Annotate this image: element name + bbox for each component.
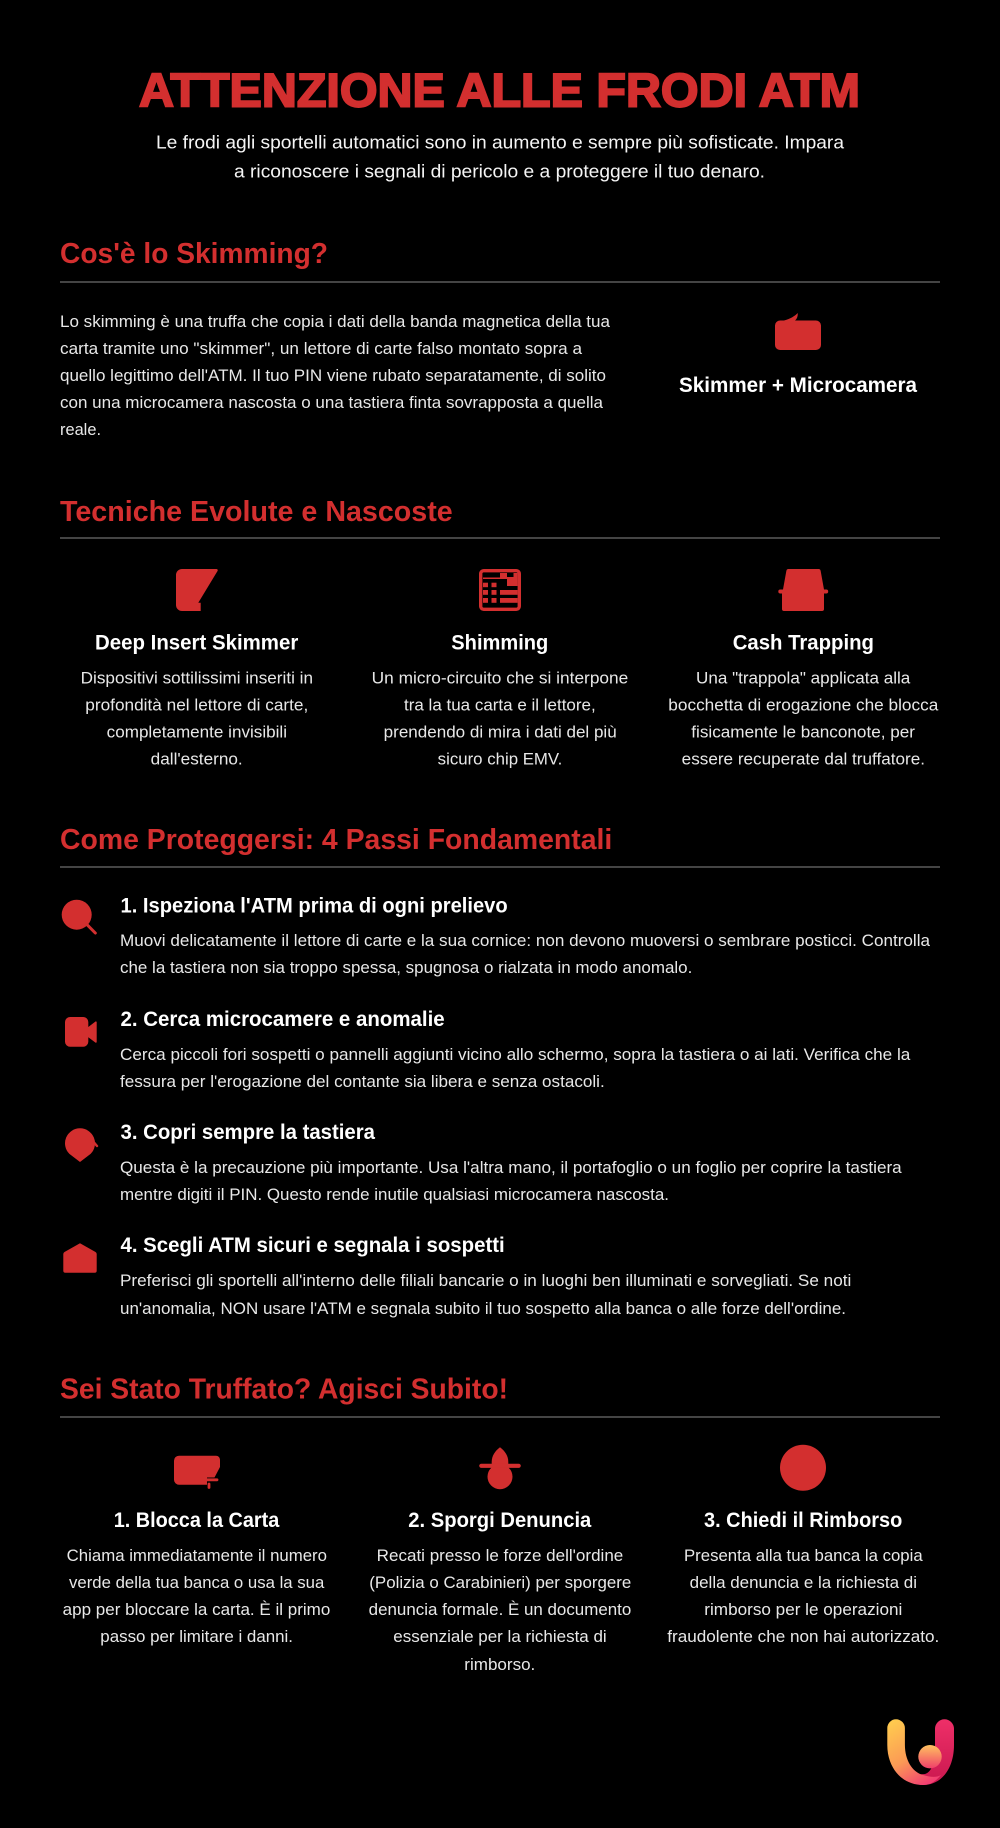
card text: Presenta alla tua banca la copia xyxy=(684,1546,923,1565)
logo xyxy=(887,1719,954,1785)
card text: essenziale per la richiesta di xyxy=(393,1627,607,1646)
step text: Preferisci gli sportelli all'interno delle filiali bancarie o in luoghi ben illuminati e sorvegliati. Se noti xyxy=(120,1271,851,1290)
step 1 xyxy=(62,894,931,977)
subtitle: a riconoscere i segnali di pericolo e a proteggere il tuo denaro. xyxy=(234,160,765,182)
card text: (Polizia o Carabinieri) per sporgere xyxy=(369,1573,631,1592)
card text: sicuro chip EMV. xyxy=(438,749,562,768)
icon: deep insert xyxy=(176,569,218,611)
label: skimmer + microcamera: Skimmer + Microcamera xyxy=(679,374,917,397)
icon: blocked card xyxy=(174,1456,220,1488)
step title: 1. Ispeziona l'ATM prima di ogni prelievo xyxy=(120,894,508,917)
card title: Deep Insert Skimmer xyxy=(95,631,298,654)
subtitle: Le frodi agli sportelli automatici sono in aumento e sempre più sofisticate. Impara xyxy=(156,132,845,152)
icon: police badge xyxy=(481,1447,519,1489)
icon: magnifier xyxy=(62,900,95,933)
text block: skimming description: quello legittimo dell'ATM. Il tuo PIN viene rubato separatamente, di solito xyxy=(60,366,606,385)
card text xyxy=(668,668,939,768)
card text xyxy=(63,1546,330,1646)
text block: skimming description: carta tramite uno "skimmer", un lettore di carte falso montato sopra a xyxy=(60,339,583,358)
card text: prendendo di mira i dati del più xyxy=(384,722,617,741)
card text: rimborso per le operazioni xyxy=(704,1600,902,1619)
text block: skimming description: reale. xyxy=(60,420,101,439)
card: chiedi il rimborso xyxy=(667,1445,939,1646)
card title: 1. Blocca la Carta xyxy=(114,1509,280,1532)
card text: Chiama immediatamente il numero xyxy=(67,1546,327,1565)
step text xyxy=(120,1158,902,1204)
card text: della denuncia e la richiesta di xyxy=(690,1573,917,1592)
card: sporgi denuncia xyxy=(369,1447,631,1674)
panel: cos'è lo skimming xyxy=(60,238,940,439)
card text: fraudolente che non hai autorizzato. xyxy=(667,1627,939,1646)
text block: skimming description xyxy=(60,312,611,439)
step text: mentre digiti il PIN. Questo rende inutile qualsiasi microcamera nascosta. xyxy=(120,1185,669,1204)
icon: shimming chip xyxy=(481,571,519,609)
card text: dall'esterno. xyxy=(151,749,243,768)
icon: refund circle xyxy=(780,1445,826,1491)
step text: che la tastiera non sia troppo spessa, spugnosa o rialzata in modo anomalo. xyxy=(120,958,692,977)
step title: 4. Scegli ATM sicuri e segnala i sospetti xyxy=(120,1234,505,1257)
card text: rimborso. xyxy=(464,1655,535,1674)
panel: come proteggersi xyxy=(60,824,940,1318)
icon: cash trap xyxy=(778,569,828,611)
step 2 xyxy=(65,1008,911,1091)
card text: profondità nel lettore di carte, xyxy=(85,695,308,714)
step 4 xyxy=(63,1234,851,1318)
step text: Questa è la precauzione più importante. Usa l'altra mano, il portafoglio o un foglio per coprire la tastiera xyxy=(120,1158,902,1177)
step text xyxy=(120,1271,851,1318)
card title: 3. Chiedi il Rimborso xyxy=(704,1509,902,1532)
card text: Una "trappola" applicata alla xyxy=(696,668,911,687)
step title: 2. Cerca microcamere e anomalie xyxy=(120,1008,445,1031)
card text: completamente invisibili xyxy=(107,722,287,741)
icon: video camera xyxy=(65,1017,97,1047)
title: ATTENZIONE ALLE FRODI ATM xyxy=(139,64,860,116)
heading: sei stato truffato: Sei Stato Truffato? Agisci Subito! xyxy=(60,1374,508,1406)
text block: skimming description: con una microcamera nascosta o una tastiera finta sovrapposta a quella xyxy=(60,393,604,412)
card text: Recati presso le forze dell'ordine xyxy=(377,1546,623,1565)
card text: verde della tua banca o usa la sua xyxy=(69,1573,325,1592)
heading: tecniche: Tecniche Evolute e Nascoste xyxy=(60,496,453,528)
card title: Shimming xyxy=(451,631,548,654)
card title: 2. Sporgi Denuncia xyxy=(408,1509,592,1532)
heading: come proteggersi: Come Proteggersi: 4 Passi Fondamentali xyxy=(60,824,612,856)
icon: covering hand xyxy=(65,1128,97,1162)
header xyxy=(139,64,860,182)
card title: Cash Trapping xyxy=(733,631,874,654)
card: blocca la carta xyxy=(63,1456,330,1646)
step title: 3. Copri sempre la tastiera xyxy=(120,1121,375,1144)
card text xyxy=(667,1546,939,1646)
card: deep insert skimmer xyxy=(81,569,313,768)
panel: sei stato truffato xyxy=(60,1374,940,1674)
card: shimming xyxy=(372,571,628,768)
card text: Dispositivi sottilissimi inseriti in xyxy=(81,668,313,687)
step text: Cerca piccoli fori sospetti o pannelli aggiunti vicino allo schermo, sopra la tastiera o ai lati. Verifica che la xyxy=(120,1045,911,1064)
card text xyxy=(81,668,313,768)
card: cash trapping xyxy=(668,569,939,768)
step text: un'anomalia, NON usare l'ATM e segnala subito il tuo sospetto alla banca o alle forze dell'ordine. xyxy=(120,1299,846,1318)
card text: tra la tua carta e il lettore, xyxy=(404,695,596,714)
text block: skimming description: Lo skimming è una truffa che copia i dati della banda magnetica della tua xyxy=(60,312,611,331)
panel: tecniche evolute xyxy=(60,496,940,768)
subtitle xyxy=(156,132,845,182)
step text xyxy=(120,1045,911,1091)
step text: fessura per l'erogazione del contante sia libera e senza ostacoli. xyxy=(120,1072,605,1091)
card text: denuncia formale. È un documento xyxy=(369,1600,631,1619)
card text: essere recuperate dal truffatore. xyxy=(682,749,925,768)
card text xyxy=(372,668,628,768)
heading: skimming: Cos'è lo Skimming? xyxy=(60,238,328,270)
card text: app per bloccare la carta. È il primo xyxy=(63,1600,330,1619)
step text xyxy=(120,931,931,977)
card text: passo per limitare i danni. xyxy=(100,1627,293,1646)
card text: bocchetta di erogazione che blocca xyxy=(668,695,939,714)
card text: Un micro-circuito che si interpone xyxy=(372,668,628,687)
step text: Muovi delicatamente il lettore di carte e la sua cornice: non devono muoversi o sembrare posticci. Controlla xyxy=(120,931,931,950)
card text xyxy=(369,1546,631,1674)
icon: bank building xyxy=(63,1243,97,1273)
card text: fisicamente le banconote, per xyxy=(691,722,915,741)
step 3 xyxy=(65,1121,902,1204)
icon: skimmer device xyxy=(775,313,821,350)
